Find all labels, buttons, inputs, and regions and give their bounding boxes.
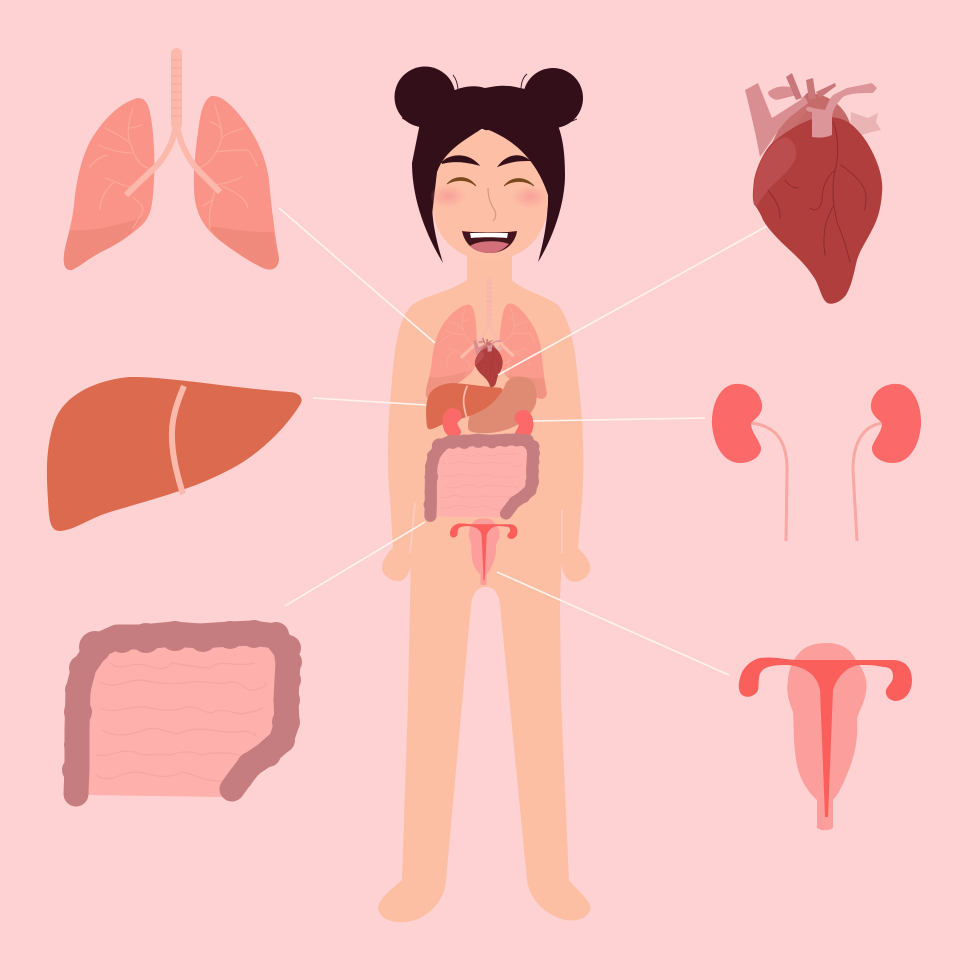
small lungs	[426, 277, 547, 399]
lungs illustration	[64, 48, 279, 270]
figure: girl's body	[378, 245, 590, 922]
bun flyaway strands	[402, 74, 577, 124]
intestine illustration	[62, 620, 302, 797]
small stomach	[468, 377, 537, 433]
head: face and hair	[394, 66, 583, 263]
small kidneys	[443, 408, 533, 439]
hair fringe	[424, 105, 548, 215]
small liver	[426, 383, 502, 429]
uterus illustration	[739, 643, 912, 830]
small intestine	[424, 433, 540, 517]
small uterus	[450, 518, 517, 585]
cheeks	[430, 184, 466, 208]
hair back buns and top	[394, 66, 583, 263]
heart illustration	[745, 73, 882, 304]
internal organs on the figure	[424, 277, 547, 585]
mouth	[462, 231, 517, 253]
closed eyes	[447, 177, 534, 186]
connector lines	[279, 208, 767, 675]
eyebrows	[442, 156, 528, 165]
face	[432, 130, 548, 260]
liver illustration	[47, 377, 302, 531]
kidneys illustration	[712, 384, 921, 541]
small heart	[473, 338, 503, 387]
nose	[488, 188, 496, 221]
